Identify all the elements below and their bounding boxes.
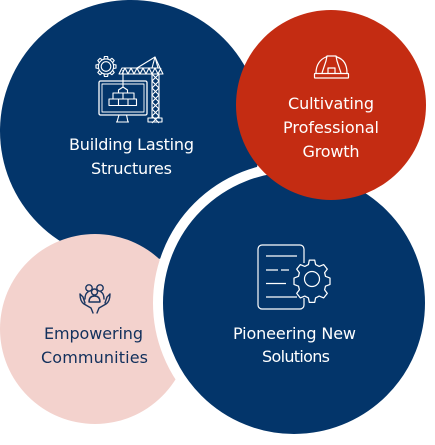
icon: hands holding people — [80, 285, 110, 313]
title: cultivating professional growth: Growth — [302, 142, 360, 161]
icon: hard hat — [314, 56, 348, 78]
title: building lasting structures: Structures — [91, 159, 172, 178]
title: pioneering new solutions: Pioneering New — [233, 324, 356, 343]
title: pioneering new solutions: Solutions — [262, 347, 330, 366]
panel: cultivating professional growth circle — [236, 10, 426, 200]
icon: document with gear — [258, 245, 330, 309]
icon: gear, monitor and crane — [96, 56, 163, 123]
panel: building lasting structures circle — [0, 0, 262, 262]
title: cultivating professional growth: Cultivating — [288, 94, 374, 113]
panel: pioneering new solutions circle — [158, 167, 430, 439]
title: empowering communities: Communities — [41, 348, 148, 367]
title: cultivating professional growth: Professional — [283, 118, 379, 137]
title: building lasting structures: Building Lasting — [69, 135, 194, 154]
title: pioneering new solutions — [233, 324, 356, 366]
title: cultivating professional growth — [283, 94, 379, 161]
panel: empowering communities circle — [0, 234, 190, 424]
title: empowering communities: Empowering — [44, 324, 143, 343]
title: empowering communities — [41, 324, 148, 367]
title: building lasting structures — [69, 135, 194, 178]
